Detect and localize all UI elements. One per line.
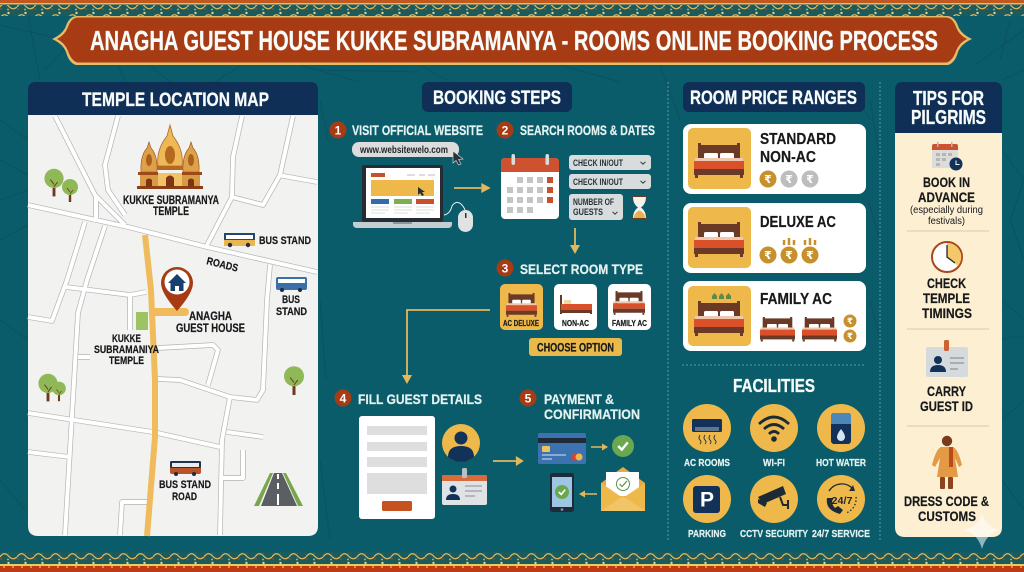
room name <box>760 131 836 166</box>
room tile <box>688 128 751 189</box>
dropdown: number of guests <box>569 194 623 220</box>
icon: tree right <box>284 366 304 395</box>
card: non-ac: NON-AC <box>562 319 589 328</box>
label: kukke subramanya temple: TEMPLE <box>153 206 189 218</box>
heading: facilities: FACILITIES <box>733 375 815 396</box>
label: roads: ROADS <box>205 255 239 275</box>
section dividers <box>668 82 880 540</box>
label: bus stand road <box>159 479 211 503</box>
panel: deluxe ac <box>683 203 866 273</box>
arrow: step 4 to step 5 <box>493 456 524 466</box>
icon: road <box>254 473 303 506</box>
card: family ac <box>608 284 651 330</box>
tips heading: TIPS FOR <box>913 88 984 110</box>
tip text: (especially during <box>910 205 983 216</box>
heading: room price ranges: ROOM PRICE RANGES <box>690 87 857 109</box>
tip text: GUEST ID <box>920 398 973 414</box>
icon: red bus <box>170 461 201 476</box>
button: choose option <box>529 338 622 356</box>
facility: hot water: HOT WATER <box>816 457 866 469</box>
step 1 heading <box>330 122 483 138</box>
step 4 heading <box>334 390 482 407</box>
label: anagha guest house <box>176 311 245 335</box>
icon: trees top left <box>44 169 78 202</box>
dropdown: number of guests: NUMBER OF <box>573 197 614 208</box>
step 1 heading: 1 <box>335 124 342 138</box>
icon: phone <box>550 473 574 512</box>
room tile <box>688 207 751 268</box>
tip text: TEMPLE <box>923 290 970 306</box>
step 5 heading: CONFIRMATION <box>544 406 640 422</box>
tip text: CARRY <box>927 383 967 399</box>
icon: location pin <box>161 267 193 311</box>
tip text <box>920 383 973 414</box>
card: ac deluxe: AC DELUXE <box>503 319 540 328</box>
icon: calendar and clock <box>932 142 962 170</box>
tip text <box>910 174 983 227</box>
step 4: fill guest details <box>334 390 487 519</box>
dropdown: check in/out second <box>569 174 651 189</box>
step 4 heading: FILL GUEST DETAILS <box>358 391 482 407</box>
facility: ac rooms: AC ROOMS <box>684 457 730 469</box>
tip text: DRESS CODE & <box>904 493 989 509</box>
facility: 24/7 service: 24/7 SERVICE <box>812 528 870 540</box>
step 5: payment and confirmation <box>520 390 645 512</box>
icon: id card <box>442 468 487 505</box>
url bar: www.websitewelo.com <box>359 145 448 156</box>
tip: dress code and customs <box>904 436 989 524</box>
panel: standard non-ac <box>683 124 866 194</box>
road network <box>28 116 317 536</box>
sparkle <box>964 512 1000 549</box>
facility: parking: PARKING <box>688 528 726 540</box>
arrow: step 2 to step 3 <box>570 228 580 254</box>
tip: book in advance <box>910 142 983 227</box>
tips heading <box>911 88 986 129</box>
tip text: CHECK <box>927 275 966 291</box>
room name: NON-AC <box>760 149 816 166</box>
label: kukke subramaniya temple <box>94 333 159 367</box>
price coins: ₹ <box>806 250 814 262</box>
price coins <box>760 170 818 188</box>
facility: hot water <box>816 404 866 469</box>
dropdown: check in/out second: CHECK IN/OUT <box>573 177 623 188</box>
tip text: festivals) <box>928 216 965 227</box>
facility: parking: P <box>700 488 714 512</box>
park <box>136 312 148 330</box>
label: bus stand: BUS STAND <box>259 235 311 247</box>
label: anagha guest house: ANAGHA <box>189 311 232 323</box>
label: kukke subramanya temple <box>123 195 219 218</box>
bottom decorative border <box>0 552 1024 572</box>
beds <box>760 317 837 342</box>
price coins: ₹ <box>806 174 814 186</box>
tip text: ADVANCE <box>918 189 975 205</box>
room name: FAMILY AC <box>760 291 832 308</box>
facility: cctv security: CCTV SECURITY <box>740 528 808 540</box>
label: bus stand road: ROAD <box>172 491 197 503</box>
price coins: ₹ <box>785 174 793 186</box>
price coins: ₹ <box>764 174 772 186</box>
arrow: envelope to phone <box>579 490 597 498</box>
step 3 heading: 3 <box>502 262 509 276</box>
icon: id badge <box>926 340 968 377</box>
icon: guest avatar <box>442 424 480 462</box>
label: kukke subramaniya temple: KUKKE <box>112 333 141 345</box>
step 2 heading: SEARCH ROOMS & DATES <box>520 122 655 138</box>
arrow: step 3 to step 4 <box>402 310 490 384</box>
room name: DELUXE AC <box>760 214 836 231</box>
label: bus stand right <box>276 294 307 318</box>
label: anagha guest house: GUEST HOUSE <box>176 323 245 335</box>
step 5 heading <box>520 390 640 422</box>
tips heading: PILGRIMS <box>911 107 986 129</box>
room tile <box>688 286 751 346</box>
label: kukke subramaniya temple: SUBRAMANIYA <box>94 344 159 356</box>
facility: parking <box>683 475 731 540</box>
panel: family ac <box>683 281 866 351</box>
label: bus stand right: STAND <box>276 306 307 318</box>
icon: pilgrim figure <box>932 436 962 489</box>
step 3 heading: SELECT ROOM TYPE <box>520 261 643 277</box>
card: family ac: FAMILY AC <box>612 319 647 328</box>
top decorative border <box>0 0 1024 16</box>
icon: confirmed check <box>612 435 634 457</box>
price coins: ₹ <box>764 250 772 262</box>
arrow: card to check <box>591 444 608 450</box>
heading: booking steps <box>422 82 572 112</box>
map heading: TEMPLE LOCATION MAP <box>82 89 269 111</box>
facility: wi-fi <box>750 404 798 469</box>
dropdown: number of guests: GUESTS <box>573 207 603 218</box>
step 4 heading: 4 <box>340 392 347 406</box>
icon: form <box>359 416 435 519</box>
heading: room price ranges <box>683 82 865 112</box>
price coins: ₹ <box>847 331 853 341</box>
price coins <box>844 314 856 342</box>
facility: 24/7 service: 24/7 <box>832 495 853 507</box>
icon: mouse pointer <box>453 151 463 165</box>
step 2 heading <box>496 122 655 138</box>
step 3: select room type <box>496 260 651 356</box>
price coins: ₹ <box>785 250 793 262</box>
tip text <box>922 275 972 321</box>
step 2 heading: 2 <box>502 124 509 138</box>
icon: temple <box>137 125 203 189</box>
card: ac deluxe <box>500 284 543 330</box>
label: kukke subramaniya temple: TEMPLE <box>109 355 144 367</box>
step 1: visit official website <box>330 122 483 232</box>
icon: envelope <box>601 467 645 511</box>
icon: computer mouse <box>444 202 473 232</box>
label: kukke subramanya temple: KUKKE SUBRAMANYA <box>123 195 219 207</box>
heading: booking steps: BOOKING STEPS <box>433 87 561 109</box>
dropdown: check in/out: CHECK IN/OUT <box>573 158 623 169</box>
icon: yellow bus <box>224 233 255 247</box>
facility: wi-fi: WI-FI <box>763 457 785 469</box>
icon: hourglass <box>631 195 648 220</box>
step 3 heading <box>496 260 643 277</box>
tip: carry guest id <box>920 340 973 414</box>
icon: trees lower left <box>38 374 66 401</box>
price coins <box>760 238 818 264</box>
card: non-ac <box>554 284 597 330</box>
tip text: CUSTOMS <box>918 508 976 524</box>
facility: 24/7 service <box>812 475 870 540</box>
room name: STANDARD <box>760 131 836 148</box>
button: choose option: CHOOSE OPTION <box>537 342 614 354</box>
icon: laptop <box>353 165 452 228</box>
label: bus stand right: BUS <box>282 294 300 306</box>
facility: ac rooms <box>683 404 731 469</box>
step 1 heading: VISIT OFFICIAL WEBSITE <box>352 122 483 138</box>
icon: calendar <box>501 154 559 219</box>
tip text: BOOK IN <box>923 174 970 190</box>
step 5 heading: 5 <box>525 392 532 406</box>
icon: credit card <box>538 433 586 464</box>
icon: clock <box>932 242 962 272</box>
tip text <box>904 493 989 524</box>
panel: tips for pilgrims <box>895 82 1002 537</box>
tip: check temple timings <box>922 242 972 321</box>
arrow: step 1 to step 2 <box>454 183 491 193</box>
step 5 heading: PAYMENT & <box>544 391 614 407</box>
icon: blue bus <box>276 277 307 292</box>
title banner <box>52 16 972 65</box>
tip text: TIMINGS <box>922 305 972 321</box>
facility: cctv security <box>740 475 808 540</box>
label: bus stand road: BUS STAND <box>159 479 211 491</box>
price coins: ₹ <box>847 316 853 326</box>
dropdown: check in/out <box>569 155 651 170</box>
step 2: search rooms and dates <box>496 122 655 220</box>
url bar <box>352 142 459 157</box>
panel: temple location map <box>28 82 318 536</box>
